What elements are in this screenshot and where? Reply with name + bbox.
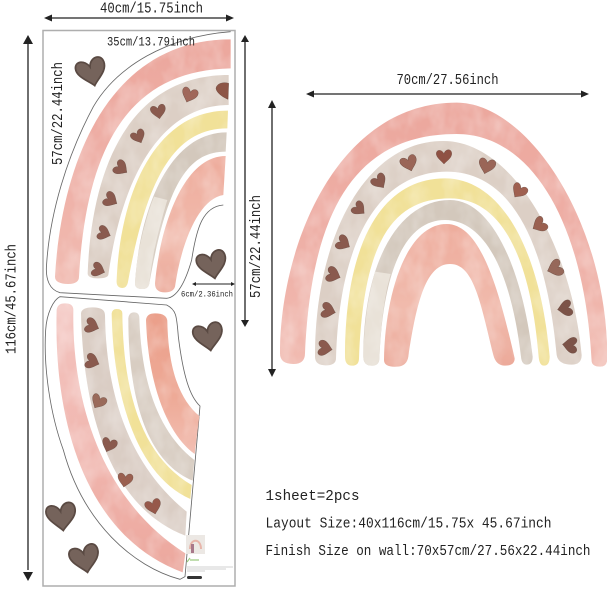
arrow: finished width: [306, 90, 589, 98]
label: sheet height: 116cm/45.67inch: [4, 244, 20, 354]
product label thumbnail: [186, 535, 233, 579]
die cut outline top: [46, 32, 231, 298]
arrow: piece height: [241, 35, 249, 327]
text block: specifications: Layout Size:40x116cm/15.75x 45.67inch: [266, 516, 552, 532]
arrow: sheet width: [44, 14, 234, 22]
panel: finished rainbow: [280, 103, 607, 367]
label: sheet width: 40cm/15.75inch: [100, 2, 203, 18]
hearts on finished rainbow: [317, 150, 578, 357]
small hearts bottom: [83, 317, 163, 516]
arrow: finished height: [268, 100, 276, 377]
arrow: margin: [192, 282, 235, 286]
text block: specifications: [266, 488, 590, 560]
rainbow bands top: [55, 39, 231, 292]
label: arc width: 35cm/13.79inch: [107, 36, 195, 50]
die cut outline bottom: [45, 297, 200, 579]
rainbow bands finished: [280, 103, 607, 367]
label: finished width: 70cm/27.56inch: [396, 73, 498, 89]
label: margin: 6cm/2.36inch: [181, 290, 233, 300]
arrow: sheet height: [23, 35, 33, 581]
bottom sticker piece: [45, 297, 225, 579]
big hearts top: [74, 56, 229, 281]
label: piece height inside: 57cm/22.44inch: [51, 62, 67, 165]
top sticker piece: [46, 32, 231, 298]
panel: layout sheet: [43, 30, 235, 586]
rainbow bands bottom: [56, 303, 199, 572]
small hearts top: [90, 83, 229, 279]
big hearts bottom: [45, 321, 225, 575]
label: piece height outside: 57cm/22.44inch: [249, 195, 265, 298]
text block: specifications: 1sheet=2pcs: [266, 488, 360, 505]
